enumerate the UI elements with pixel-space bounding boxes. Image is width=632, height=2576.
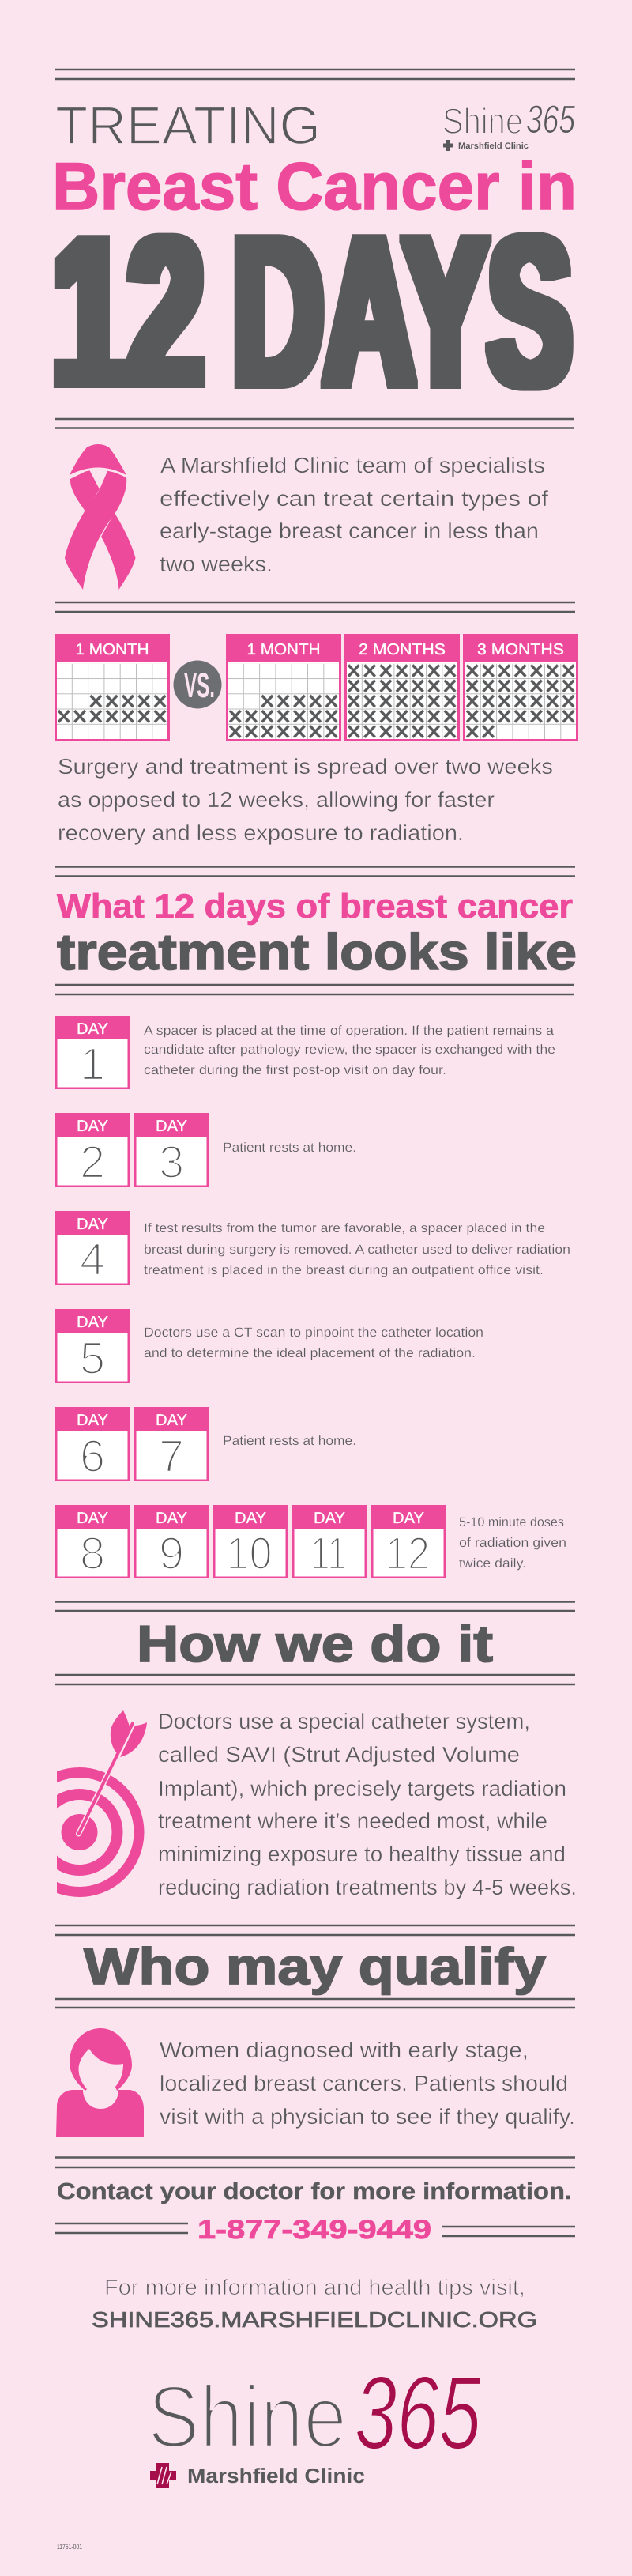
timeline: day 1: catheter during the first post-op visit on day four. [144, 1063, 446, 1077]
timeline: day 1: DAY [77, 1020, 108, 1038]
timeline: days 2 and 3: DAY [77, 1118, 108, 1135]
text: who may qualify: localized breast cancers. Patients should [160, 2071, 568, 2095]
text: how we do it: treatment where it’s needed most, while [158, 1808, 547, 1833]
text: comparison: recovery and less exposure to radiation. [58, 820, 464, 845]
text: how we do it [158, 1709, 577, 1899]
text: intro: early-stage breast cancer in less than [160, 519, 539, 543]
icon: clinic cross [150, 2463, 176, 2488]
timeline: days 8 to 12: DAY [393, 1510, 424, 1527]
timeline: days 8 to 12: DAY [314, 1510, 345, 1527]
timeline: day 4: If test results from the tumor are favorable, a spacer placed in the [144, 1221, 545, 1235]
heading: treating: TREATING [55, 96, 321, 156]
timeline: days 6 and 7: Patient rests at home. [223, 1434, 356, 1448]
calendar: 1 month short course [55, 634, 170, 741]
timeline: days 8 to 12: 5-10 minute doses [459, 1515, 564, 1529]
callout: contact: 1-877-349-9449 [198, 2215, 431, 2245]
timeline: days 8 to 12: twice daily. [459, 1556, 526, 1571]
text: job number: 11751-001 [57, 2543, 82, 2551]
timeline: days 8 to 12: 9 [159, 1528, 184, 1579]
timeline: day 4: treatment is placed in the breast during an outpatient office visit. [144, 1263, 544, 1277]
calendar: 2 months [344, 634, 460, 741]
timeline: days 2 and 3: 3 [159, 1137, 184, 1188]
timeline: days 8 to 12: 10 [226, 1528, 272, 1579]
timeline: day 1: 1 [80, 1039, 105, 1090]
icon: target and arrow [57, 1710, 147, 1897]
calendar: 1 month standard course [226, 634, 341, 741]
text: comparison: as opposed to 12 weeks, allowing for faster [58, 787, 495, 812]
calendar: 1 month standard course: 1 MONTH [246, 641, 321, 658]
text: comparison [58, 754, 553, 845]
text: intro: effectively can treat certain types of [160, 486, 548, 511]
text: intro: two weeks. [160, 552, 273, 576]
text: comparison: Surgery and treatment is spread over two weeks [58, 754, 553, 779]
logo wordmark: Shine [442, 100, 523, 141]
heading: 12: 12 [52, 193, 204, 429]
timeline: day 1: A spacer is placed at the time of operation. If the patient remains a [144, 1024, 555, 1038]
timeline: days 8 to 12: 11 [310, 1528, 347, 1579]
badge: vs [174, 661, 221, 708]
title [52, 96, 577, 431]
timeline: days 6 and 7: 7 [159, 1431, 184, 1482]
text: who may qualify: Women diagnosed with early stage, [160, 2038, 529, 2062]
text: who may qualify [160, 2038, 575, 2129]
icon: pink ribbon [65, 444, 136, 590]
timeline: day 5 [55, 1309, 483, 1384]
icon: clinic cross [443, 140, 453, 151]
text: how we do it: Implant), which precisely targets radiation [158, 1776, 566, 1801]
heading: how we do it: How we do it [137, 1615, 493, 1673]
timeline: days 8 to 12: 12 [386, 1528, 430, 1579]
heading: who may qualify: Who may qualify [84, 1937, 546, 1995]
heading: what 12 days: What 12 days of breast cancer [57, 888, 573, 926]
calendar: 3 months [463, 634, 578, 741]
callout: contact: Contact your doctor for more information. [57, 2179, 572, 2204]
logo: shine365 footer [148, 2355, 481, 2488]
timeline: days 8 to 12: of radiation given [459, 1536, 566, 1550]
calendar: 3 months: 3 MONTHS [477, 641, 564, 658]
timeline: day 4: 4 [80, 1234, 105, 1285]
text: intro [160, 453, 548, 576]
heading: what 12 days: treatment looks like [57, 923, 577, 980]
timeline: day 4: DAY [77, 1216, 108, 1233]
callout: contact [57, 2179, 572, 2245]
logo: shine365 header [442, 97, 575, 151]
heading: what 12 days [57, 888, 577, 980]
timeline: day 5: Doctors use a CT scan to pinpoint the catheter location [144, 1326, 483, 1340]
timeline: days 8 to 12: 8 [80, 1528, 105, 1579]
badge: vs: VS. [184, 666, 215, 705]
logo numerals: 365 [355, 2355, 481, 2471]
timeline: days 6 and 7: DAY [156, 1412, 187, 1429]
text: website: SHINE365.MARSHFIELDCLINIC.ORG [92, 2307, 537, 2332]
timeline: days 8 to 12 [55, 1505, 566, 1579]
text: website [92, 2275, 537, 2332]
timeline: days 2 and 3: DAY [156, 1118, 187, 1135]
logo wordmark: Shine [148, 2367, 347, 2466]
heading: breast cancer in: Breast Cancer in [52, 149, 577, 224]
text: who may qualify: visit with a physician to see if they qualify. [160, 2104, 575, 2129]
timeline: day 4 [55, 1211, 570, 1285]
text: intro: A Marshfield Clinic team of specialists [160, 453, 545, 477]
timeline: days 8 to 12: DAY [156, 1510, 187, 1527]
timeline: days 2 and 3: 2 [80, 1137, 105, 1188]
text: how we do it: Doctors use a special catheter system, [158, 1709, 530, 1733]
timeline: day 1 [55, 1016, 555, 1090]
calendar: 1 month short course: 1 MONTH [76, 641, 149, 658]
text: website: For more information and health tips visit, [104, 2275, 525, 2299]
logo: marshfield clinic: Marshfield Clinic [458, 141, 529, 151]
logo: marshfield clinic: Marshfield Clinic [187, 2464, 365, 2487]
timeline: days 8 to 12: DAY [77, 1510, 108, 1527]
text: how we do it: reducing radiation treatments by 4-5 weeks. [158, 1875, 577, 1899]
timeline: days 2 and 3 [55, 1113, 356, 1188]
text: how we do it: called SAVI (Strut Adjusted Volume [158, 1742, 520, 1767]
text: how we do it: minimizing exposure to healthy tissue and [158, 1842, 566, 1866]
timeline: day 4: breast during surgery is removed. A catheter used to deliver radiation [144, 1243, 570, 1257]
icon: woman [56, 2028, 144, 2137]
timeline: day 5: 5 [80, 1333, 105, 1384]
timeline: days 6 and 7 [55, 1407, 356, 1482]
timeline: day 5: DAY [77, 1314, 108, 1331]
timeline: day 5: and to determine the ideal placement of the radiation. [144, 1346, 476, 1360]
logo numerals: 365 [526, 97, 575, 141]
timeline: days 8 to 12: DAY [235, 1510, 266, 1527]
timeline: day 1: candidate after pathology review, the spacer is exchanged with the [144, 1043, 555, 1057]
timeline: days 2 and 3: Patient rests at home. [223, 1141, 356, 1155]
timeline: days 6 and 7: 6 [80, 1431, 105, 1482]
calendar: 2 months: 2 MONTHS [359, 641, 446, 658]
timeline: days 6 and 7: DAY [77, 1412, 108, 1429]
